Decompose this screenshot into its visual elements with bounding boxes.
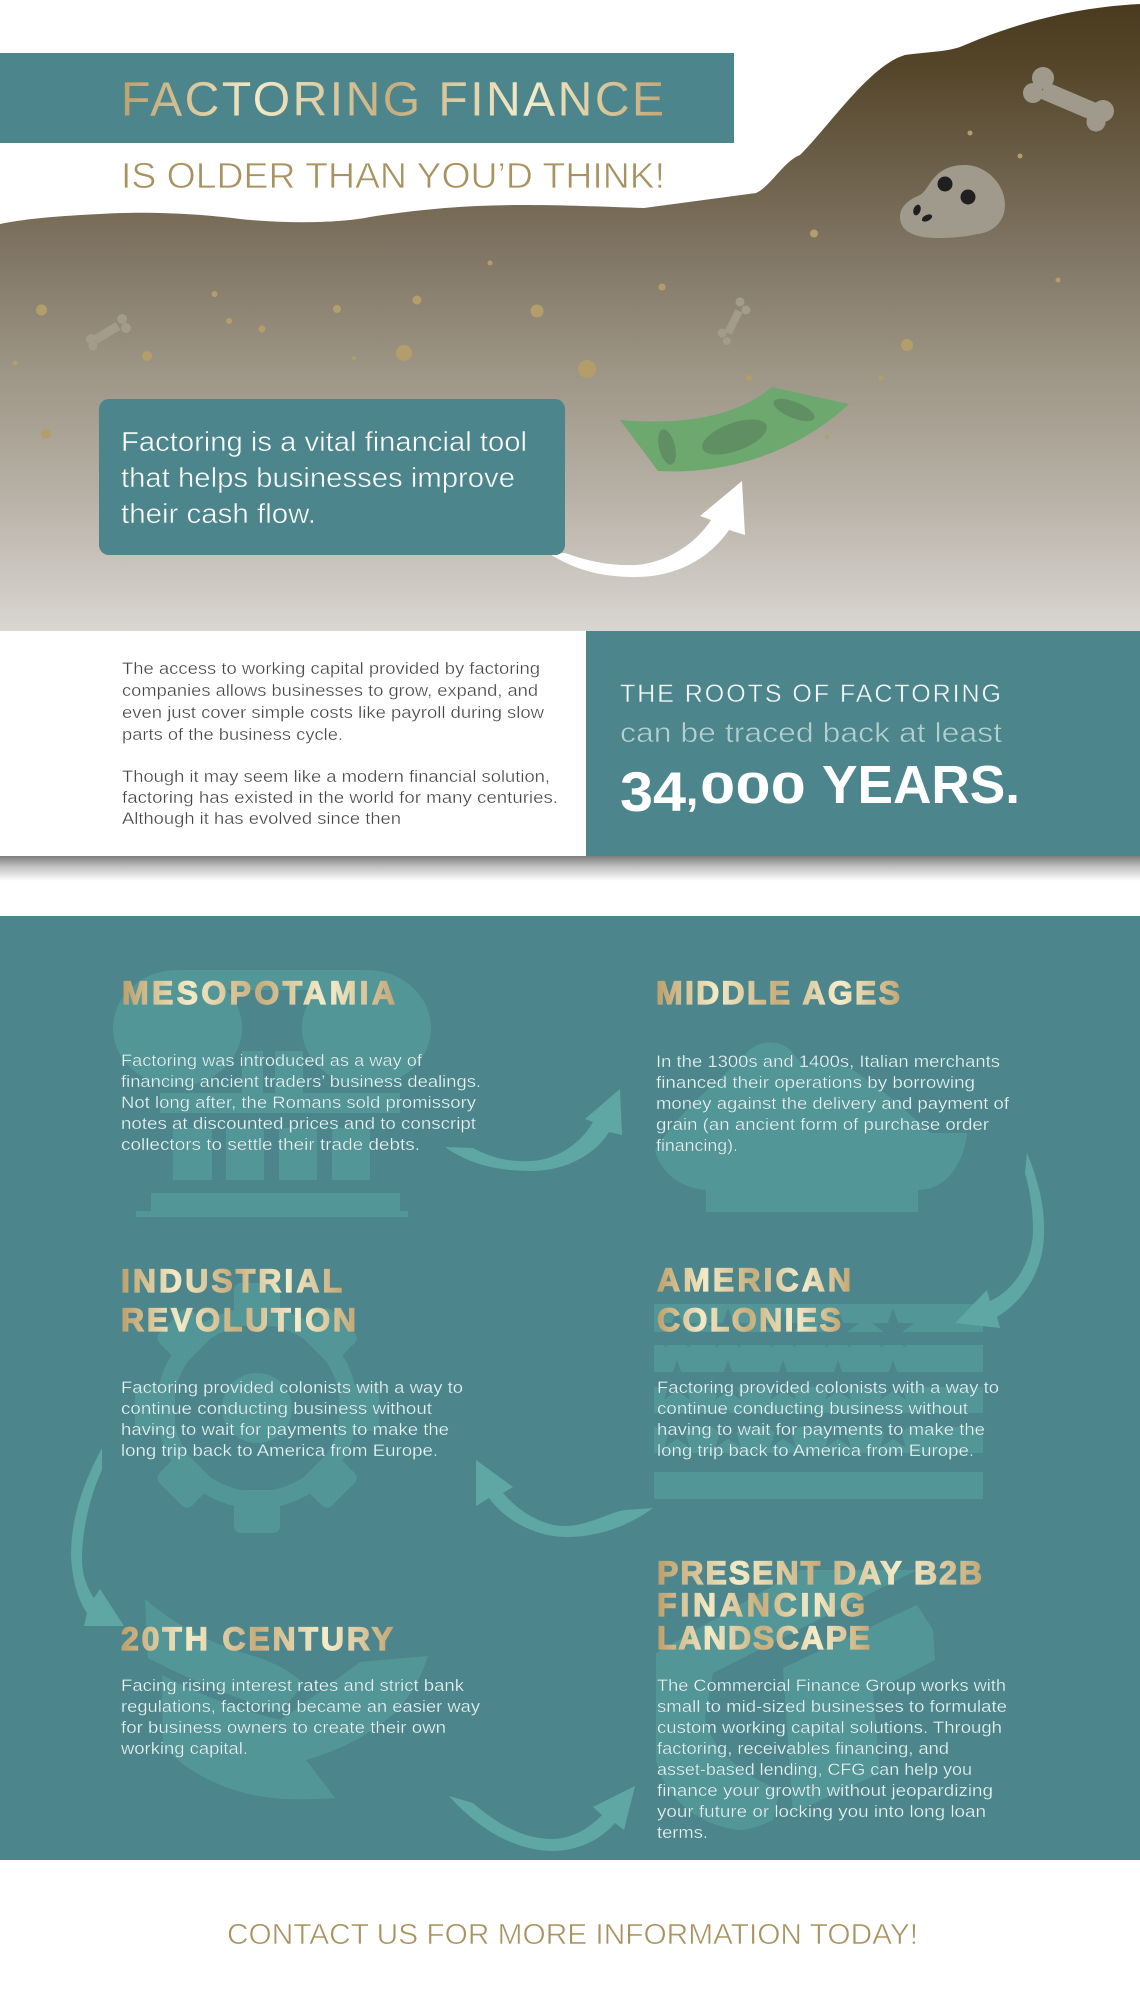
panel: 34,000 years: YEARS.: [822, 755, 1020, 815]
section: industrial revolution: continue conducting business without: [121, 1399, 432, 1418]
section: mesopotamia: collectors to settle their trade debts.: [121, 1135, 420, 1154]
section: present day: custom working capital solutions. Through: [657, 1718, 1002, 1737]
section: present day: terms.: [657, 1823, 708, 1842]
arrow: mesopotamia to middle ages: [445, 1089, 622, 1171]
section: middle ages: [656, 975, 1009, 1155]
icon: large bone: [1023, 67, 1114, 132]
section: american colonies: AMERICAN: [657, 1262, 851, 1298]
icon: watermark column: [113, 970, 431, 1217]
section: present day: your future or locking you into long loan: [657, 1802, 986, 1821]
section: present day: small to mid-sized businesses to formulate: [657, 1697, 1007, 1716]
section: present day: LANDSCAPE: [657, 1620, 870, 1656]
section: 20th century: 20TH CENTURY: [121, 1621, 393, 1657]
section: present day: finance your growth without jeopardizing: [657, 1781, 993, 1800]
text block: intro paragraphs: The access to working capital provided by factoring: [122, 659, 540, 678]
section: industrial revolution: having to wait for payments to make the: [121, 1420, 449, 1439]
text block: intro paragraphs: [122, 659, 558, 828]
section: middle ages: grain (an ancient form of purchase order: [656, 1115, 989, 1134]
section: industrial revolution: Factoring provided colonists with a way to: [121, 1378, 463, 1397]
section: american colonies: COLONIES: [657, 1302, 841, 1338]
section: present day: PRESENT DAY B2B: [657, 1555, 982, 1591]
panel: timeline: [0, 916, 1140, 1860]
section: present day: The Commercial Finance Group works with: [657, 1676, 1006, 1695]
panel: 34,000 years: can be traced back at least: [620, 717, 1002, 748]
section: 20th century: [120, 1621, 481, 1758]
icon: small bone left: [86, 314, 130, 350]
section: 20th century: regulations, factoring became an easier way: [121, 1697, 481, 1716]
text block: intro paragraphs: even just cover simple costs like payroll during slow: [122, 703, 545, 722]
section: mesopotamia: Factoring was introduced as a way of: [121, 1051, 422, 1070]
subtitle: IS OLDER THAN YOU’D THINK!: [121, 155, 665, 196]
arrow: industrial revolution to 20th century: [71, 1448, 124, 1626]
section: mesopotamia: MESOPOTAMIA: [122, 975, 395, 1011]
footer call to action: CONTACT US FOR MORE INFORMATION TODAY!: [227, 1919, 918, 1951]
icon: watermark flag: [654, 1304, 983, 1499]
panel: hero ground: [0, 4, 1140, 631]
arrow: white to bill: [548, 481, 745, 577]
callout: vital financial tool: their cash flow.: [121, 498, 316, 529]
title banner: [0, 53, 734, 143]
section: present day: asset-based lending, CFG can help you: [657, 1760, 972, 1779]
text block: intro paragraphs: factoring has existed in the world for many centuries.: [122, 788, 558, 807]
section: american colonies: Factoring provided colonists with a way to: [657, 1378, 999, 1397]
section: american colonies: continue conducting business without: [657, 1399, 968, 1418]
section: 20th century: working capital.: [120, 1739, 248, 1758]
icon: watermark CFG logo: [656, 1570, 935, 1830]
callout: vital financial tool: that helps businesses improve: [121, 462, 515, 493]
text block: intro paragraphs: parts of the business cycle.: [122, 725, 343, 744]
section: industrial revolution: [121, 1263, 463, 1460]
section: american colonies: [657, 1262, 999, 1460]
panel: 34,000 years: 000: [700, 764, 806, 813]
icon: watermark grain bowl: [655, 1043, 967, 1212]
text block: intro paragraphs: companies allows businesses to grow, expand, and: [122, 681, 538, 700]
section: mesopotamia: [121, 975, 481, 1154]
section: american colonies: having to wait for payments to make the: [657, 1420, 985, 1439]
section: present day: FINANCING: [657, 1587, 865, 1623]
text block: intro paragraphs: Though it may seem like a modern financial solution,: [122, 767, 550, 786]
section: middle ages: In the 1300s and 1400s, Italian merchants: [656, 1052, 1000, 1071]
panel: 34,000 years: ,: [686, 766, 698, 815]
section: present day: [657, 1555, 1007, 1842]
section: industrial revolution: REVOLUTION: [121, 1302, 356, 1338]
icon: watermark recycling arrows: [145, 1599, 428, 1799]
icon: watermark gear: [135, 1283, 379, 1533]
icon: small bone middle: [718, 298, 750, 344]
section: 20th century: Facing rising interest rates and strict bank: [121, 1676, 465, 1695]
arrow: 20th century to present day: [449, 1786, 635, 1851]
dots: gold specks: [12, 130, 1060, 439]
section: industrial revolution: long trip back to America from Europe.: [121, 1441, 438, 1460]
icon: skull: [900, 165, 1005, 238]
section: middle ages: financing).: [656, 1136, 738, 1155]
drop shadow band: [0, 856, 1140, 881]
section: middle ages: financed their operations by borrowing: [656, 1073, 975, 1092]
callout: vital financial tool: [99, 399, 565, 555]
section: mesopotamia: notes at discounted prices and to conscript: [121, 1114, 476, 1133]
section: present day: factoring, receivables financing, and: [657, 1739, 949, 1758]
panel: 34,000 years: [586, 631, 1140, 856]
section: mesopotamia: Not long after, the Romans sold promissory: [121, 1093, 477, 1112]
panel: 34,000 years: THE ROOTS OF FACTORING: [620, 680, 1001, 708]
arrow: middle ages to american colonies: [955, 1153, 1044, 1328]
icon: dollar bill: [620, 387, 849, 471]
panel: 34,000 years: 34: [620, 760, 686, 823]
title: FACTORING FINANCE: [121, 74, 664, 126]
section: industrial revolution: INDUSTRIAL: [121, 1263, 342, 1299]
section: middle ages: money against the delivery and payment of: [656, 1094, 1009, 1113]
section: 20th century: for business owners to create their own: [121, 1718, 446, 1737]
section: middle ages: MIDDLE AGES: [656, 975, 900, 1011]
arrow: american colonies to industrial revolution: [476, 1460, 653, 1537]
text block: intro paragraphs: Although it has evolved since then: [122, 809, 401, 828]
callout: vital financial tool: Factoring is a vital financial tool: [121, 426, 527, 457]
section: mesopotamia: financing ancient traders’ business dealings.: [121, 1072, 481, 1091]
section: american colonies: long trip back to America from Europe.: [657, 1441, 974, 1460]
